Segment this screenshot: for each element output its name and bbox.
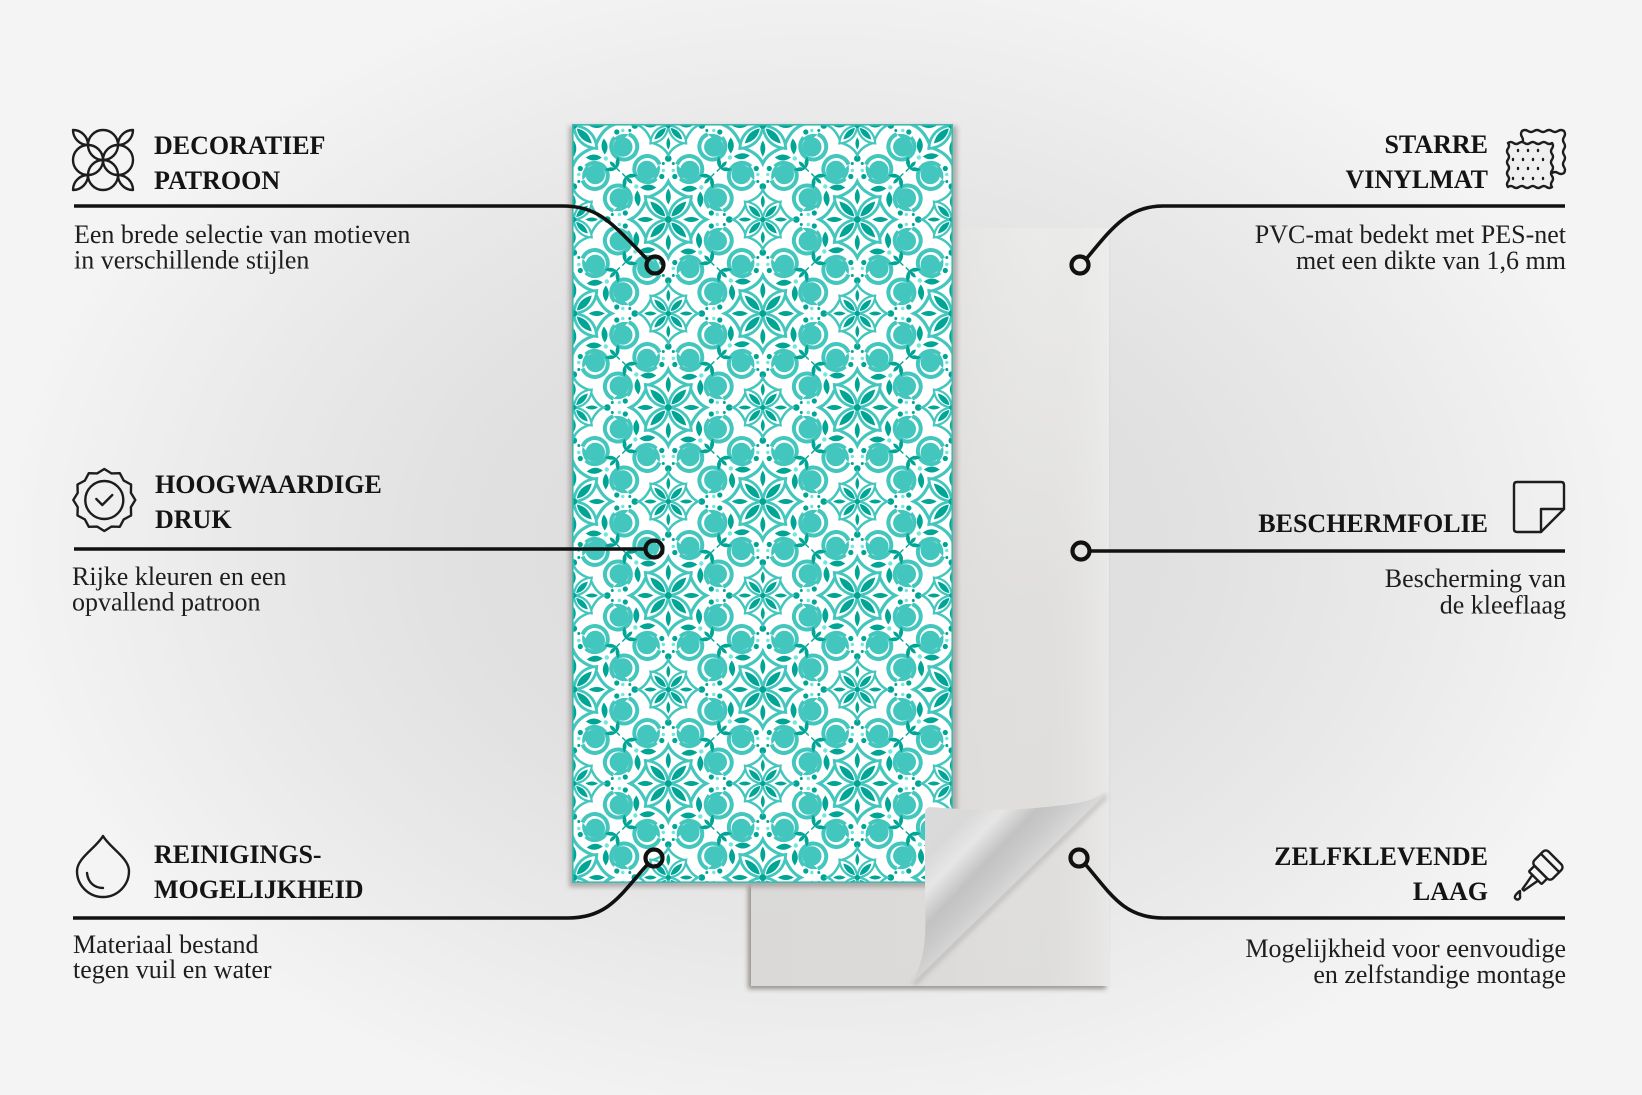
description: met een dikte van 1,6 mm	[1296, 246, 1566, 275]
callout: hoogwaardige druk	[72, 469, 662, 616]
marker	[1072, 542, 1090, 560]
heading: REINIGINGS-	[154, 840, 322, 869]
heading: PATROON	[154, 166, 280, 195]
peeled corner	[910, 792, 1108, 985]
heading: DECORATIEF	[154, 131, 325, 160]
leader line	[1086, 865, 1565, 918]
callout: zelfklevende laag	[1070, 842, 1566, 989]
heading: VINYLMAT	[1345, 165, 1488, 194]
patterned vinyl panel	[572, 124, 953, 883]
icon: glue bottle	[1514, 849, 1564, 899]
icon: protective film	[1514, 482, 1564, 532]
callout: reinigingsmogelijkheid	[73, 836, 662, 984]
heading: ZELFKLEVENDE	[1274, 842, 1488, 871]
heading: HOOGWAARDIGE	[155, 470, 382, 499]
heading: DRUK	[155, 505, 232, 534]
marker	[1070, 850, 1088, 866]
leader line	[74, 206, 648, 260]
callout: decoratief patroon	[73, 130, 664, 274]
description: Materiaal bestand	[73, 930, 259, 959]
leader line	[74, 547, 646, 551]
heading: BESCHERMFOLIE	[1258, 509, 1488, 538]
description: Rijke kleuren en een	[72, 562, 286, 591]
marker	[646, 850, 662, 866]
description: tegen vuil en water	[73, 955, 272, 984]
marker	[646, 256, 664, 274]
description: opvallend patroon	[72, 588, 260, 616]
callout: beschermfolie	[1072, 482, 1566, 620]
leader line	[1087, 206, 1565, 258]
heading: MOGELIJKHEID	[154, 875, 363, 904]
marker	[1072, 256, 1088, 274]
description: en zelfstandige montage	[1313, 960, 1566, 989]
description: Een brede selectie van motieven	[74, 220, 410, 249]
icon: water drop	[77, 836, 129, 897]
leader line	[1089, 549, 1565, 553]
callout: starre vinylmat	[1072, 130, 1567, 275]
marker	[646, 540, 662, 558]
description: PVC-mat bedekt met PES-net	[1255, 220, 1567, 249]
panel shadow	[569, 126, 957, 887]
leader line	[73, 864, 648, 918]
icon: lattice pattern	[73, 130, 133, 190]
backing sheet	[748, 228, 1109, 989]
description: Bescherming van	[1385, 564, 1566, 593]
icon: quality badge	[73, 469, 135, 531]
description: Mogelijkheid voor eenvoudige	[1245, 934, 1566, 963]
description: in verschillende stijlen	[74, 246, 309, 274]
heading: STARRE	[1384, 130, 1488, 159]
icon: textured mat	[1507, 130, 1565, 188]
description: de kleeflaag	[1440, 590, 1566, 620]
heading: LAAG	[1413, 877, 1488, 906]
